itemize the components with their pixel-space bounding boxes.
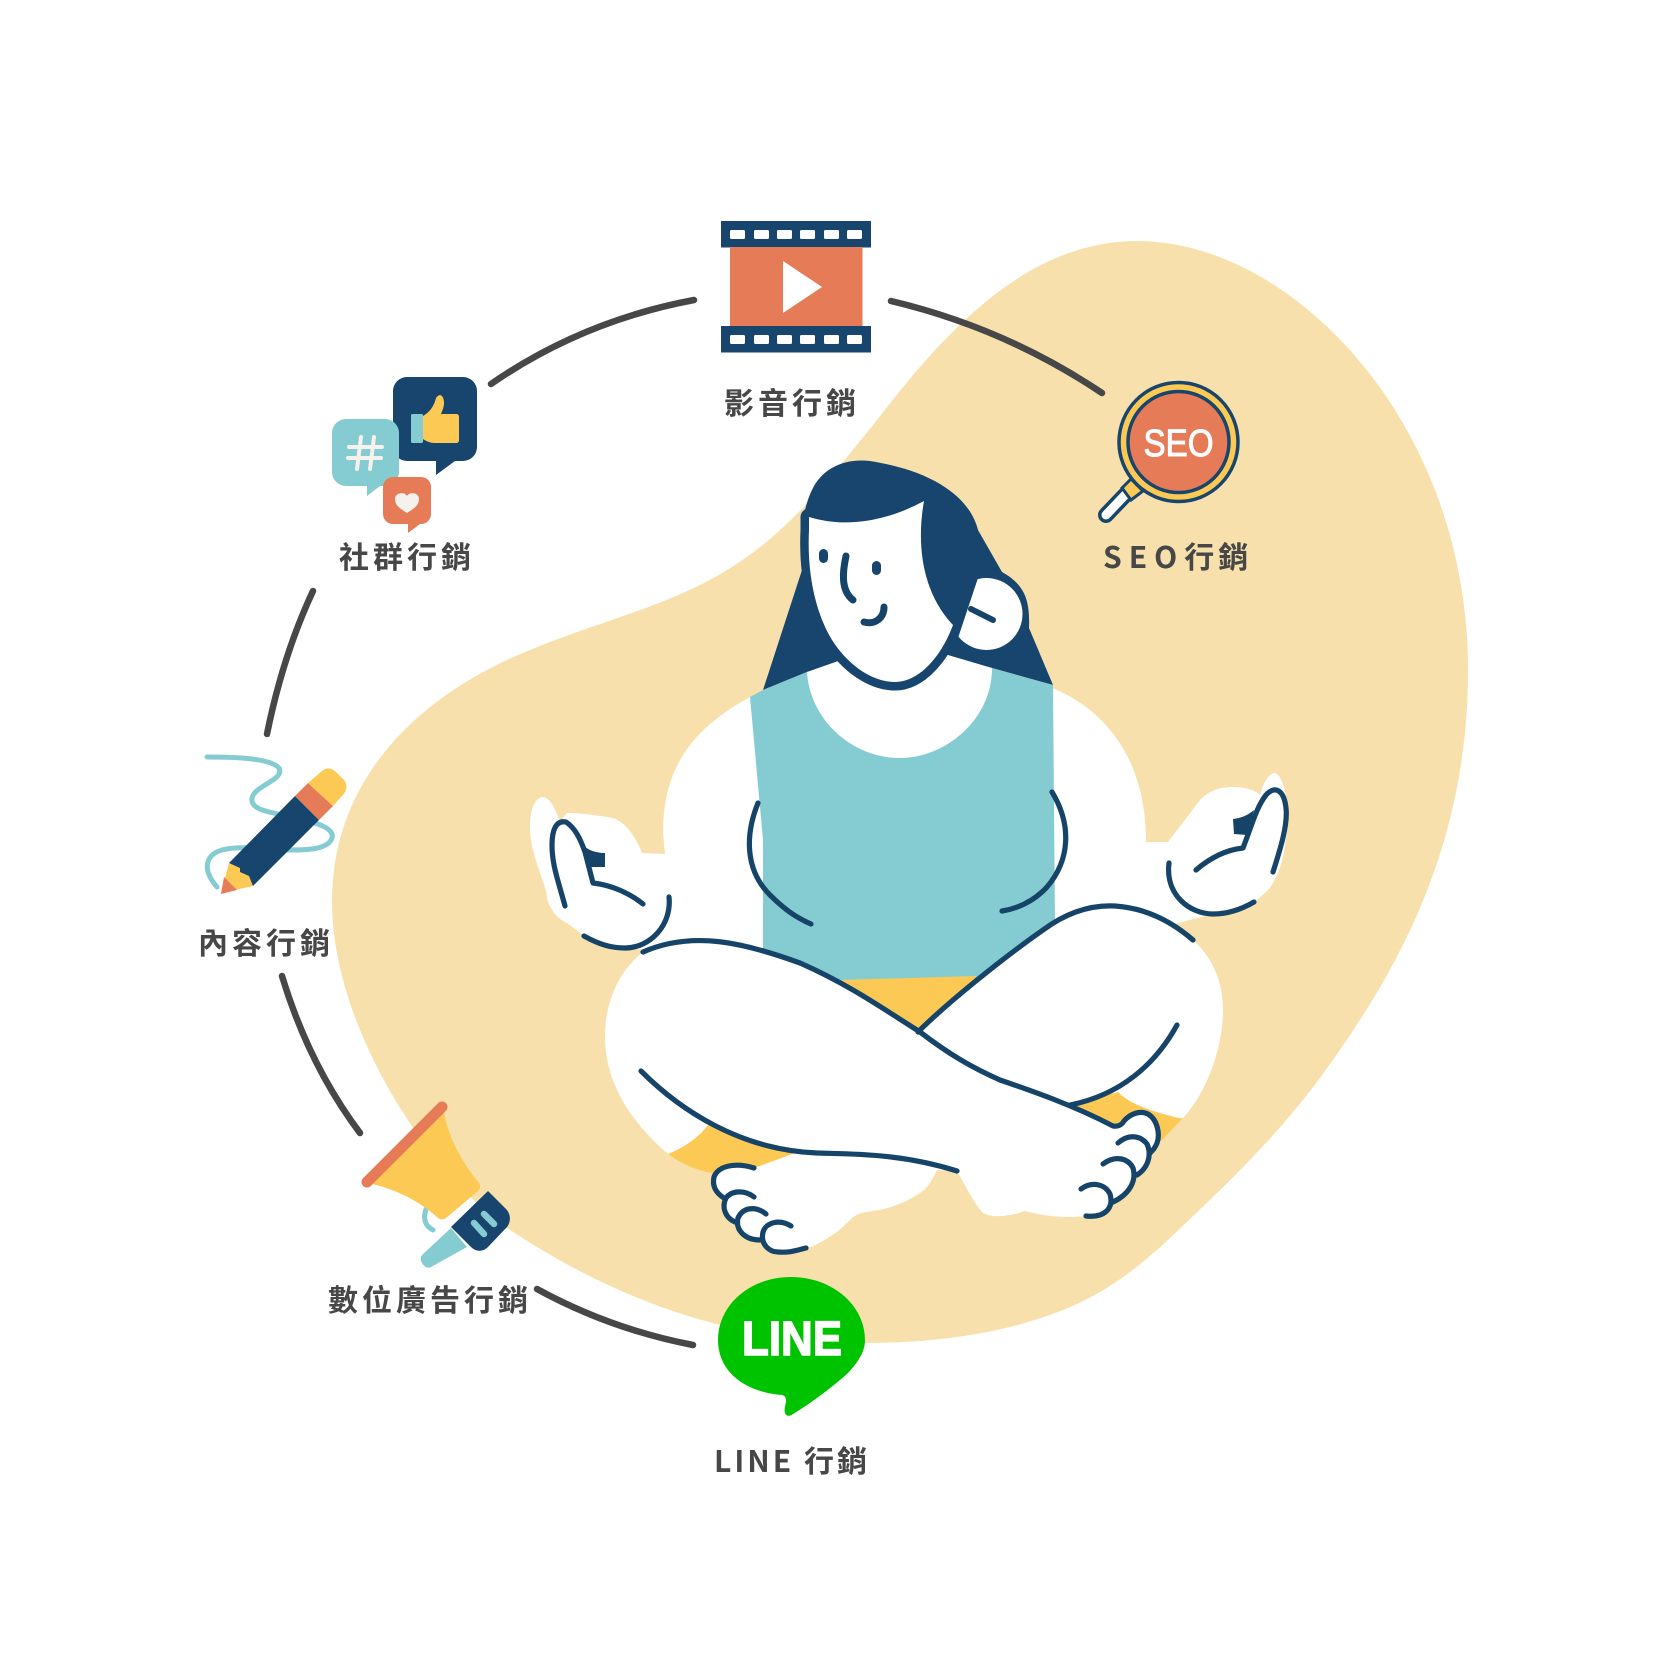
label: video marketing: 影音行銷 — [724, 379, 860, 423]
right hand bottom — [1169, 863, 1254, 914]
teal tank top — [750, 668, 1055, 985]
icon: megaphone — [367, 1107, 510, 1268]
connector arcs — [267, 300, 1102, 1345]
label: digital ad marketing: 數位廣告行銷 — [328, 1276, 532, 1320]
bun and ear — [940, 570, 1022, 650]
icon: LINE bubble: LINE — [742, 1313, 842, 1366]
woman figure — [530, 460, 1288, 1253]
icon: social media bubbles — [332, 377, 477, 533]
shorts — [840, 976, 977, 1034]
body outline strokes — [552, 790, 1286, 1252]
hash symbol — [348, 437, 382, 469]
facial features — [819, 549, 884, 623]
left arm and hand — [530, 697, 780, 960]
right thumb mark — [1233, 810, 1254, 835]
left hand fingers — [552, 822, 643, 906]
icon: pencil with scribble — [207, 757, 346, 894]
left foot toes — [713, 1165, 754, 1198]
right inner thigh — [1070, 1025, 1177, 1105]
upper crossed leg line — [643, 941, 1158, 1153]
right sock — [1072, 1092, 1182, 1142]
crossed leg and feet — [605, 941, 1158, 1253]
background blob — [332, 241, 1468, 1343]
icon: LINE bubble — [718, 1277, 865, 1416]
right hand fingers — [1196, 790, 1286, 872]
right arm and hand — [1040, 684, 1288, 960]
icon: SEO magnifier — [1106, 382, 1238, 515]
left inner thigh — [641, 1071, 957, 1171]
label: LINE marketing: LINE 行銷 — [714, 1437, 870, 1481]
left bust — [749, 803, 811, 924]
left hand bottom — [584, 897, 669, 948]
face — [809, 501, 953, 682]
right bust — [1002, 792, 1066, 911]
left sock — [668, 1125, 800, 1173]
label: social marketing: 社群行銷 — [339, 533, 475, 577]
icon: video film — [721, 221, 871, 352]
right foot toes — [1118, 1137, 1149, 1175]
label: SEO marketing: SEO行銷 — [1103, 533, 1252, 577]
icon: SEO magnifier: SEO — [1144, 423, 1214, 465]
label: content marketing: 內容行銷 — [198, 919, 334, 963]
hair — [763, 460, 1053, 690]
neck and chest — [807, 655, 992, 758]
left thumb mark — [581, 843, 605, 867]
right thigh line — [918, 906, 1193, 1032]
right thigh — [918, 906, 1223, 1118]
